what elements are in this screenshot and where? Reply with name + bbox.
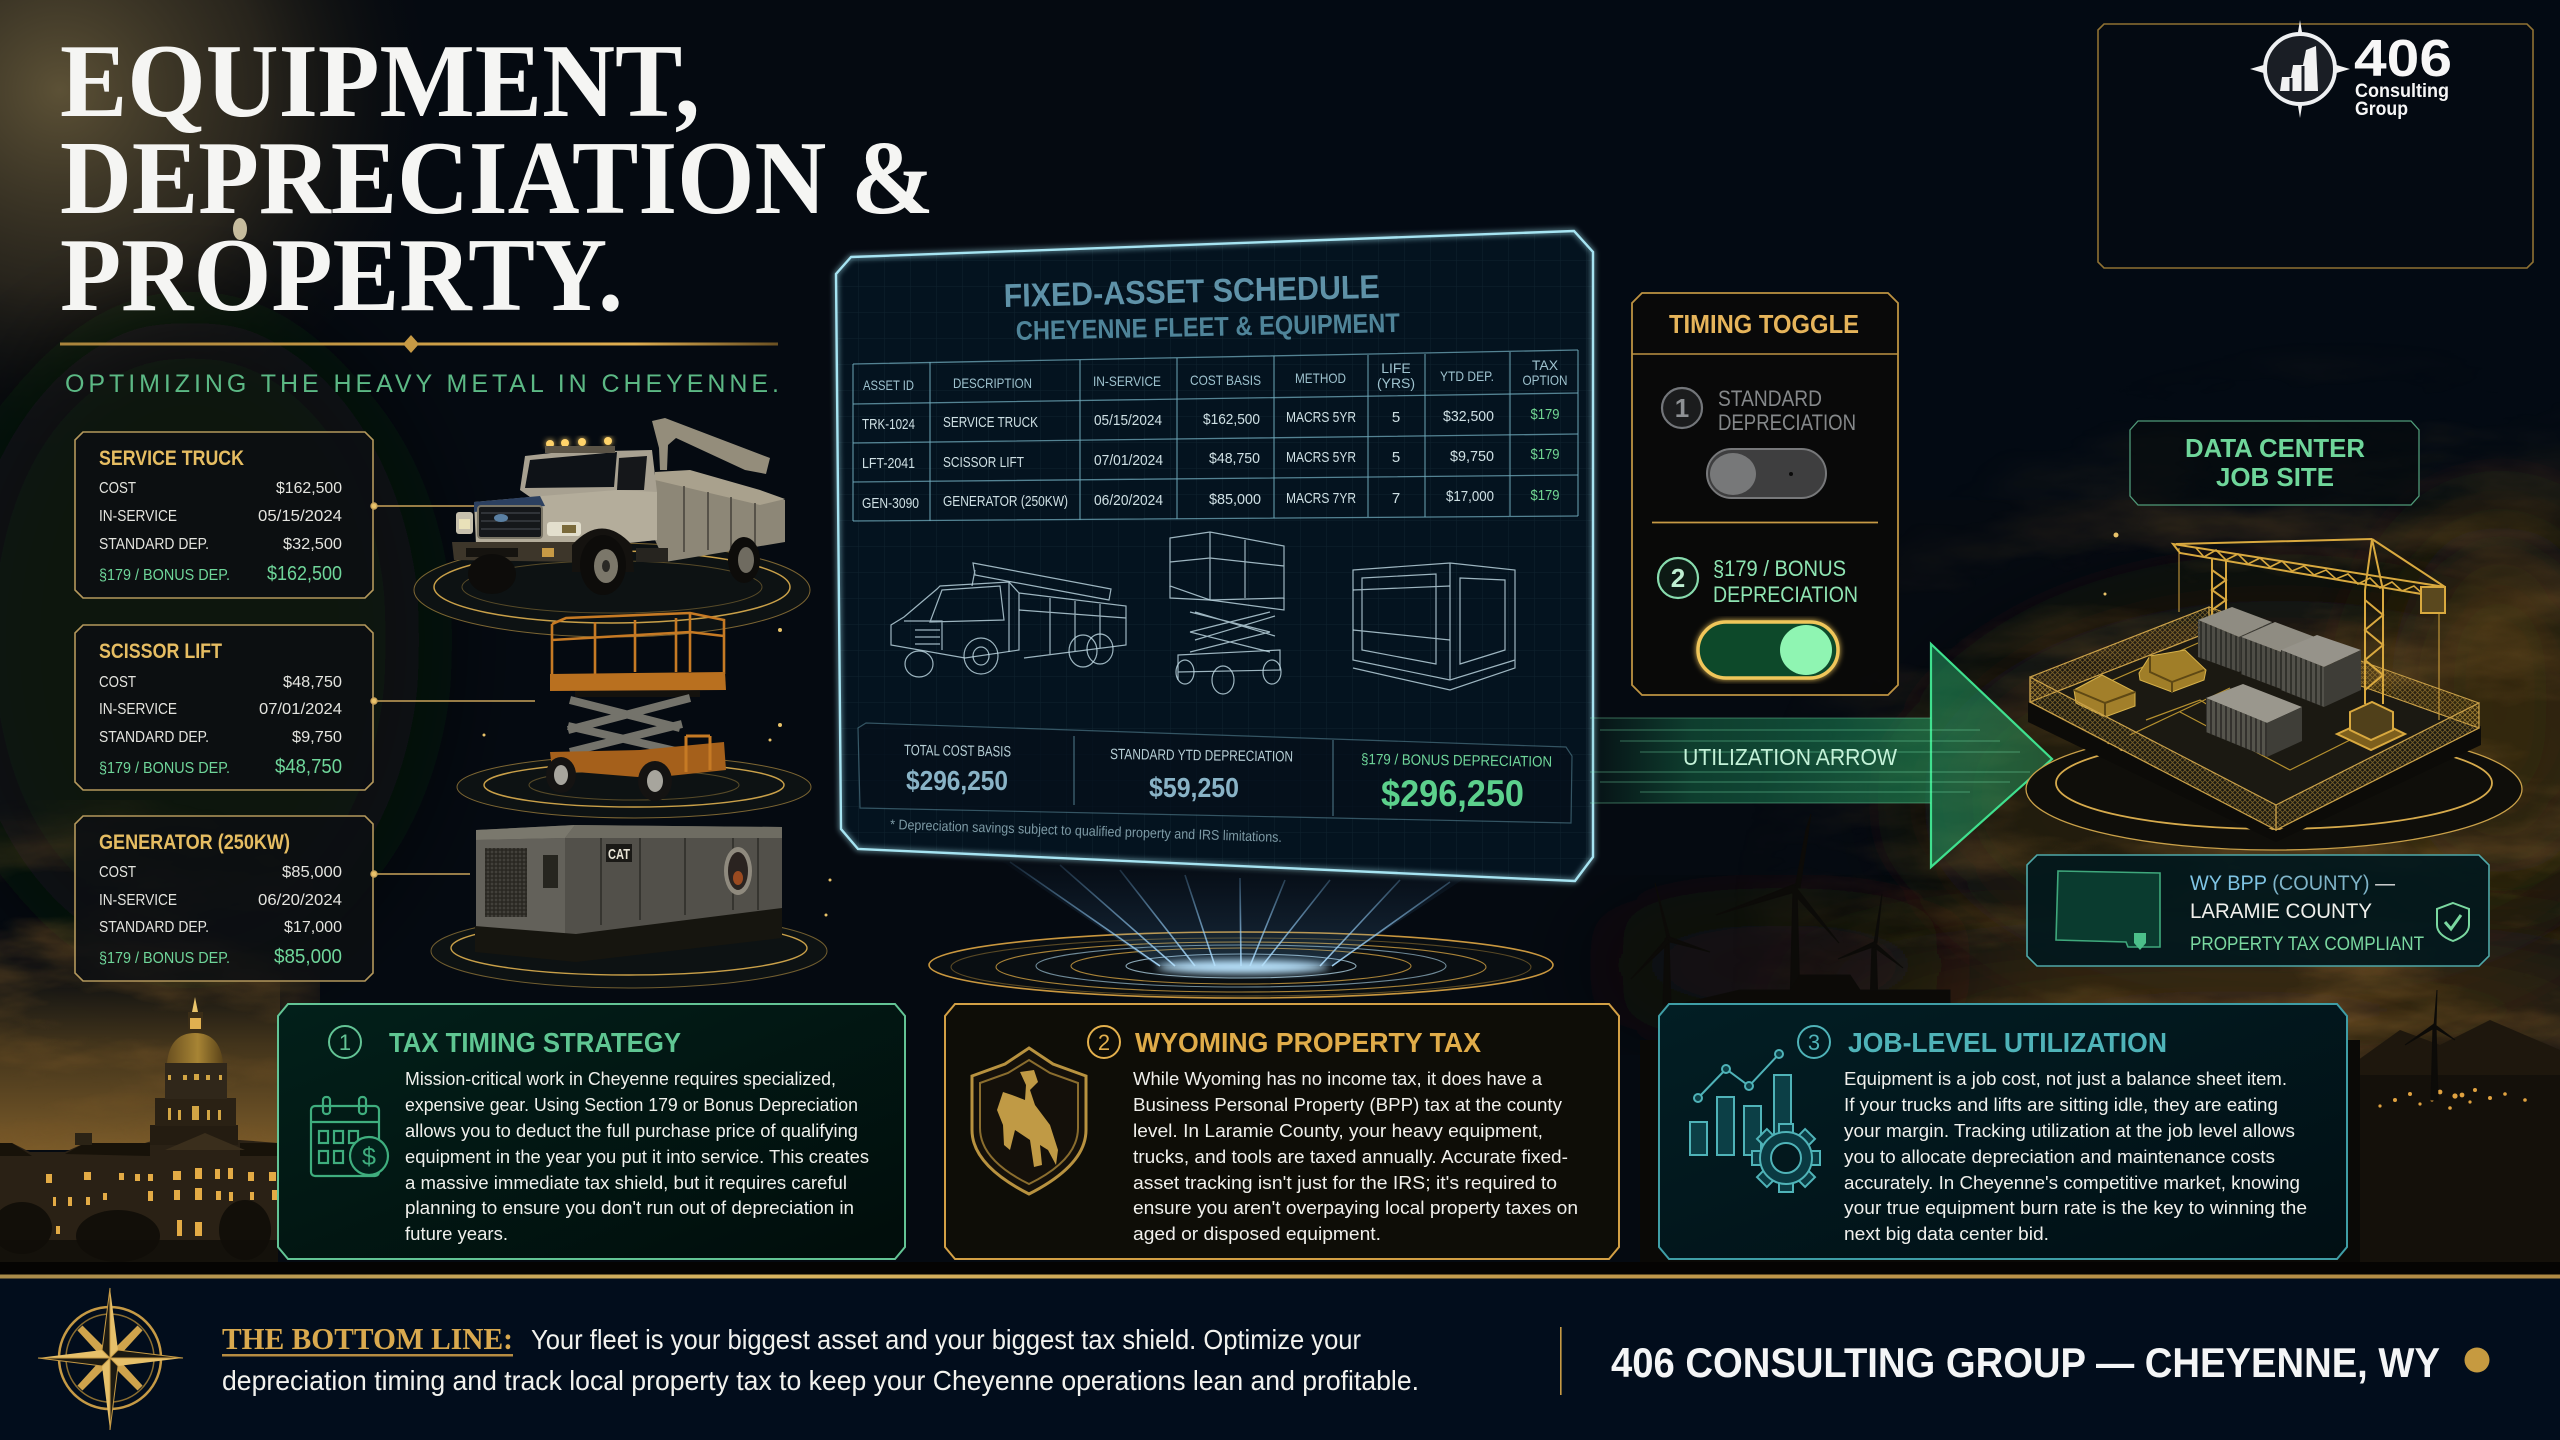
summary strip: STANDARD YTD DEPRECIATION xyxy=(1110,746,1293,766)
data center job site label: DATA CENTER xyxy=(2185,433,2365,463)
bottom line text xyxy=(222,1321,1419,1396)
scissor lift xyxy=(546,613,726,801)
icon: chart and gear xyxy=(1690,1050,1820,1192)
schedule table: MACRS 5YR xyxy=(1286,409,1356,426)
logo wordmark: Consulting xyxy=(2355,81,2449,102)
blueprint: truck xyxy=(891,563,1126,677)
asset card: scissor lift: §179 / BONUS DEP. xyxy=(99,760,230,777)
schedule heading: CHEYENNE FLEET & EQUIPMENT xyxy=(1015,308,1400,346)
panel: wyoming property tax: Business Personal Property (BPP) tax at the county xyxy=(1133,1095,1562,1115)
generator: CAT xyxy=(608,846,630,863)
fixed asset schedule panel xyxy=(836,231,1593,881)
asset card: scissor lift: $9,750 xyxy=(292,729,342,746)
schedule table: $179 xyxy=(1530,406,1560,423)
schedule table: LFT-2041 xyxy=(862,455,915,472)
asset card: generator: §179 / BONUS DEP. xyxy=(99,950,230,967)
data center job site label xyxy=(2130,421,2419,505)
summary strip: TOTAL COST BASIS xyxy=(904,742,1011,760)
utilization arrow xyxy=(1590,644,2052,867)
schedule heading: FIXED-ASSET SCHEDULE xyxy=(1003,268,1380,314)
logo box xyxy=(2098,20,2533,268)
schedule table: GENERATOR (250KW) xyxy=(943,493,1068,510)
timing toggle panel xyxy=(1632,293,1898,695)
schedule table: SCISSOR LIFT xyxy=(943,454,1024,471)
asset card: scissor lift: 07/01/2024 xyxy=(259,701,342,718)
schedule table: LIFE xyxy=(1381,360,1411,376)
blueprint: lift xyxy=(1170,532,1284,694)
site vehicles xyxy=(2074,650,2206,717)
panel: job-level utilization xyxy=(1659,1004,2347,1259)
option 1: standard depreciation: 1 xyxy=(1675,393,1689,423)
asset card: service truck: STANDARD DEP. xyxy=(99,536,209,553)
pedestal rings: generator xyxy=(431,914,827,988)
logo mark xyxy=(2250,20,2350,118)
bottom line text: Your fleet is your biggest asset and your biggest tax shield. Optimize your xyxy=(531,1324,1361,1355)
summary strip xyxy=(858,723,1572,845)
icon: calendar dollar: $ xyxy=(362,1143,376,1171)
schedule table: IN-SERVICE xyxy=(1093,373,1161,389)
service truck xyxy=(452,418,785,595)
asset card: generator: $85,000 xyxy=(274,946,342,968)
panel: job-level utilization: 3 xyxy=(1808,1030,1820,1055)
isometric job site xyxy=(2026,539,2522,850)
option 1: standard depreciation xyxy=(1662,386,1856,498)
light flare xyxy=(233,218,247,240)
logo wordmark: Group xyxy=(2355,99,2408,120)
asset card: generator: $85,000 xyxy=(282,864,342,881)
asset card: scissor lift: COST xyxy=(99,674,136,691)
asset card: generator: IN-SERVICE xyxy=(99,892,177,909)
panel: job-level utilization: your margin. Tracking utilization at the job level allows xyxy=(1844,1121,2295,1141)
schedule table: $17,000 xyxy=(1446,488,1494,505)
asset card: generator: 06/20/2024 xyxy=(258,892,342,909)
asset card: scissor lift: STANDARD DEP. xyxy=(99,729,209,746)
panel: wyoming property tax: WYOMING PROPERTY TAX xyxy=(1135,1027,1481,1058)
option 2: bonus depreciation: 2 xyxy=(1671,563,1685,593)
schedule table: $85,000 xyxy=(1209,491,1261,508)
second crane mast xyxy=(2179,548,2226,619)
panel: tax timing strategy: future years. xyxy=(405,1224,508,1244)
panel: wyoming property tax: 2 xyxy=(1098,1030,1110,1055)
schedule table: 5 xyxy=(1392,409,1400,426)
subtitle: OPTIMIZING THE HEAVY METAL IN CHEYENNE. xyxy=(65,370,779,398)
schedule table: $179 xyxy=(1530,487,1560,504)
panel: job-level utilization: JOB-LEVEL UTILIZATION xyxy=(1848,1027,2167,1058)
schedule table: $162,500 xyxy=(1203,411,1260,428)
asset card: scissor lift: SCISSOR LIFT xyxy=(99,640,222,663)
panel: wyoming property tax: aged or disposed equipment. xyxy=(1133,1224,1381,1244)
panel: wyoming property tax: While Wyoming has no income tax, it does have a xyxy=(1133,1069,1543,1089)
title: PROPERTY. xyxy=(60,216,623,333)
footer bar xyxy=(0,1274,2560,1440)
option 2: bonus depreciation: DEPRECIATION xyxy=(1713,582,1858,607)
pedestal rings: truck xyxy=(414,543,810,637)
option 1: standard depreciation: DEPRECIATION xyxy=(1718,410,1856,435)
icon: bucking horse shield xyxy=(972,1048,1086,1194)
schedule table: $32,500 xyxy=(1443,408,1494,425)
panel: job-level utilization: If your trucks and lifts are sitting idle, they are eating xyxy=(1844,1095,2278,1115)
wind turbines xyxy=(1631,814,2455,1100)
summary strip: $296,250 xyxy=(1381,773,1524,814)
title: DEPRECIATION & xyxy=(60,119,934,236)
asset card: service truck: $162,500 xyxy=(267,563,342,585)
asset card: service truck: COST xyxy=(99,480,136,497)
gold rule xyxy=(60,335,778,353)
panel: tax timing strategy: equipment in the year you put it into service. This creates xyxy=(405,1147,869,1167)
panel: job-level utilization: next big data center bid. xyxy=(1844,1224,2049,1244)
wyoming property tax badge xyxy=(2027,855,2489,966)
pedestal rings: scissor lift xyxy=(457,756,811,818)
footer brand: 406 CONSULTING GROUP — CHEYENNE, WY xyxy=(1611,1339,2440,1386)
panel: wyoming property tax: asset tracking isn't just for the IRS; it's required to xyxy=(1133,1173,1557,1193)
panel: job-level utilization: accurately. In Cheyenne's competitive market, knowing xyxy=(1844,1173,2300,1193)
schedule table: $9,750 xyxy=(1450,448,1494,465)
asset card: generator: $17,000 xyxy=(284,919,342,936)
asset card: scissor lift: $48,750 xyxy=(283,674,342,691)
blueprint: generator xyxy=(1353,563,1515,690)
front fence xyxy=(2030,677,2479,830)
icon: calendar dollar xyxy=(311,1097,388,1176)
schedule table: MACRS 7YR xyxy=(1286,490,1356,507)
asset card: scissor lift xyxy=(75,625,373,790)
utilization arrow: UTILIZATION ARROW xyxy=(1683,744,1897,770)
asset card: service truck: $32,500 xyxy=(283,536,342,553)
panel: tax timing strategy xyxy=(278,1004,905,1259)
option 1: standard depreciation: STANDARD xyxy=(1718,386,1822,411)
schedule table: $48,750 xyxy=(1209,450,1260,467)
summary strip: $59,250 xyxy=(1149,772,1239,803)
schedule table: MACRS 5YR xyxy=(1286,449,1356,466)
asset card: service truck: §179 / BONUS DEP. xyxy=(99,567,230,584)
schedule table: GEN-3090 xyxy=(862,495,919,512)
background: city lights xyxy=(2378,1088,2527,1110)
panel: job-level utilization: Equipment is a job cost, not just a balance sheet item. xyxy=(1844,1069,2287,1089)
schedule table: METHOD xyxy=(1295,370,1346,386)
asset card: scissor lift: IN-SERVICE xyxy=(99,701,177,718)
schedule table: TAX xyxy=(1532,357,1559,373)
schedule table: COST BASIS xyxy=(1190,372,1261,388)
wyoming property tax badge: PROPERTY TAX COMPLIANT xyxy=(2190,934,2424,955)
containers xyxy=(2198,607,2361,757)
asset card: generator: GENERATOR (250KW) xyxy=(99,831,290,854)
panel: tax timing strategy: allows you to deduct the full purchase price of qualifying xyxy=(405,1121,858,1141)
asset card: service truck: $162,500 xyxy=(276,480,342,497)
option 2: bonus depreciation: §179 / BONUS xyxy=(1713,556,1846,581)
summary strip: $296,250 xyxy=(906,765,1008,796)
asset card: service truck: SERVICE TRUCK xyxy=(99,447,244,470)
logo wordmark: 406 xyxy=(2354,30,2452,88)
schedule table: DESCRIPTION xyxy=(953,375,1032,391)
title xyxy=(60,22,934,333)
schedule table: 7 xyxy=(1392,490,1400,507)
panel: tax timing strategy: Mission-critical work in Cheyenne requires specialized, xyxy=(405,1069,836,1089)
asset card: service truck: IN-SERVICE xyxy=(99,508,177,525)
schedule table: 5 xyxy=(1392,449,1400,466)
timing toggle panel: TIMING TOGGLE xyxy=(1669,309,1859,339)
asset card: service truck xyxy=(75,432,373,598)
wyoming map xyxy=(2056,871,2160,950)
panel: wyoming property tax: ensure you aren't overpaying local property taxes on xyxy=(1133,1198,1578,1218)
asset card: service truck: 05/15/2024 xyxy=(258,508,342,525)
gold dot xyxy=(2464,1348,2490,1372)
icon: shield check xyxy=(2437,903,2469,941)
schedule table: 07/01/2024 xyxy=(1094,452,1163,469)
schedule heading xyxy=(1003,268,1400,346)
tower crane xyxy=(2173,539,2445,750)
capitol building xyxy=(0,997,278,1262)
schedule table: (YRS) xyxy=(1377,375,1415,391)
panel: tax timing strategy: a massive immediate tax shield, but it requires careful xyxy=(405,1173,847,1193)
title: EQUIPMENT, xyxy=(60,22,700,139)
schedule table: ASSET ID xyxy=(863,377,914,393)
generator xyxy=(475,825,782,962)
schedule table xyxy=(853,350,1578,521)
panel: tax timing strategy: TAX TIMING STRATEGY xyxy=(389,1027,681,1058)
schedule table: TRK-1024 xyxy=(862,416,915,433)
panel: wyoming property tax xyxy=(945,1004,1619,1259)
compass icon xyxy=(38,1288,183,1430)
summary strip: * Depreciation savings subject to qualified property and IRS limitations. xyxy=(890,816,1282,845)
bottom line text: THE BOTTOM LINE: xyxy=(222,1321,513,1356)
hologram projector xyxy=(929,862,1553,998)
logo wordmark xyxy=(2354,30,2452,120)
asset card: generator: STANDARD DEP. xyxy=(99,919,209,936)
asset card: generator xyxy=(75,816,373,981)
schedule table: YTD DEP. xyxy=(1440,368,1494,384)
data center job site label: JOB SITE xyxy=(2216,462,2334,492)
panel: tax timing strategy: expensive gear. Using Section 179 or Bonus Depreciation xyxy=(405,1095,858,1115)
panel: wyoming property tax: level. In Laramie County, your heavy equipment, xyxy=(1133,1121,1543,1141)
bottom line text: depreciation timing and track local property tax to keep your Cheyenne operations lean and profitable. xyxy=(222,1365,1419,1396)
schedule table: SERVICE TRUCK xyxy=(943,414,1038,431)
wyoming property tax badge: WY BPP (COUNTY) — xyxy=(2190,872,2395,895)
panel: tax timing strategy: 1 xyxy=(339,1030,351,1055)
asset card: scissor lift: $48,750 xyxy=(275,756,342,778)
panel: job-level utilization: your true equipment burn rate is the key to winning the xyxy=(1844,1198,2307,1218)
connector lines xyxy=(371,503,535,877)
option 2: bonus depreciation xyxy=(1658,556,1858,678)
background: sparkles xyxy=(482,532,2118,916)
schedule table: OPTION xyxy=(1522,372,1568,388)
summary strip: §179 / BONUS DEPRECIATION xyxy=(1361,751,1552,771)
asset card: generator: COST xyxy=(99,864,136,881)
schedule table: 05/15/2024 xyxy=(1094,412,1162,429)
panel: wyoming property tax: trucks, and tools are taxed annually. Accurate fixed- xyxy=(1133,1147,1568,1167)
schedule table: 06/20/2024 xyxy=(1094,492,1163,509)
wyoming property tax badge: LARAMIE COUNTY xyxy=(2190,900,2372,923)
schedule table: $179 xyxy=(1530,446,1560,463)
panel: tax timing strategy: planning to ensure you don't run out of depreciation in xyxy=(405,1198,854,1218)
panel: job-level utilization: you to allocate depreciation and maintenance costs xyxy=(1844,1147,2275,1167)
